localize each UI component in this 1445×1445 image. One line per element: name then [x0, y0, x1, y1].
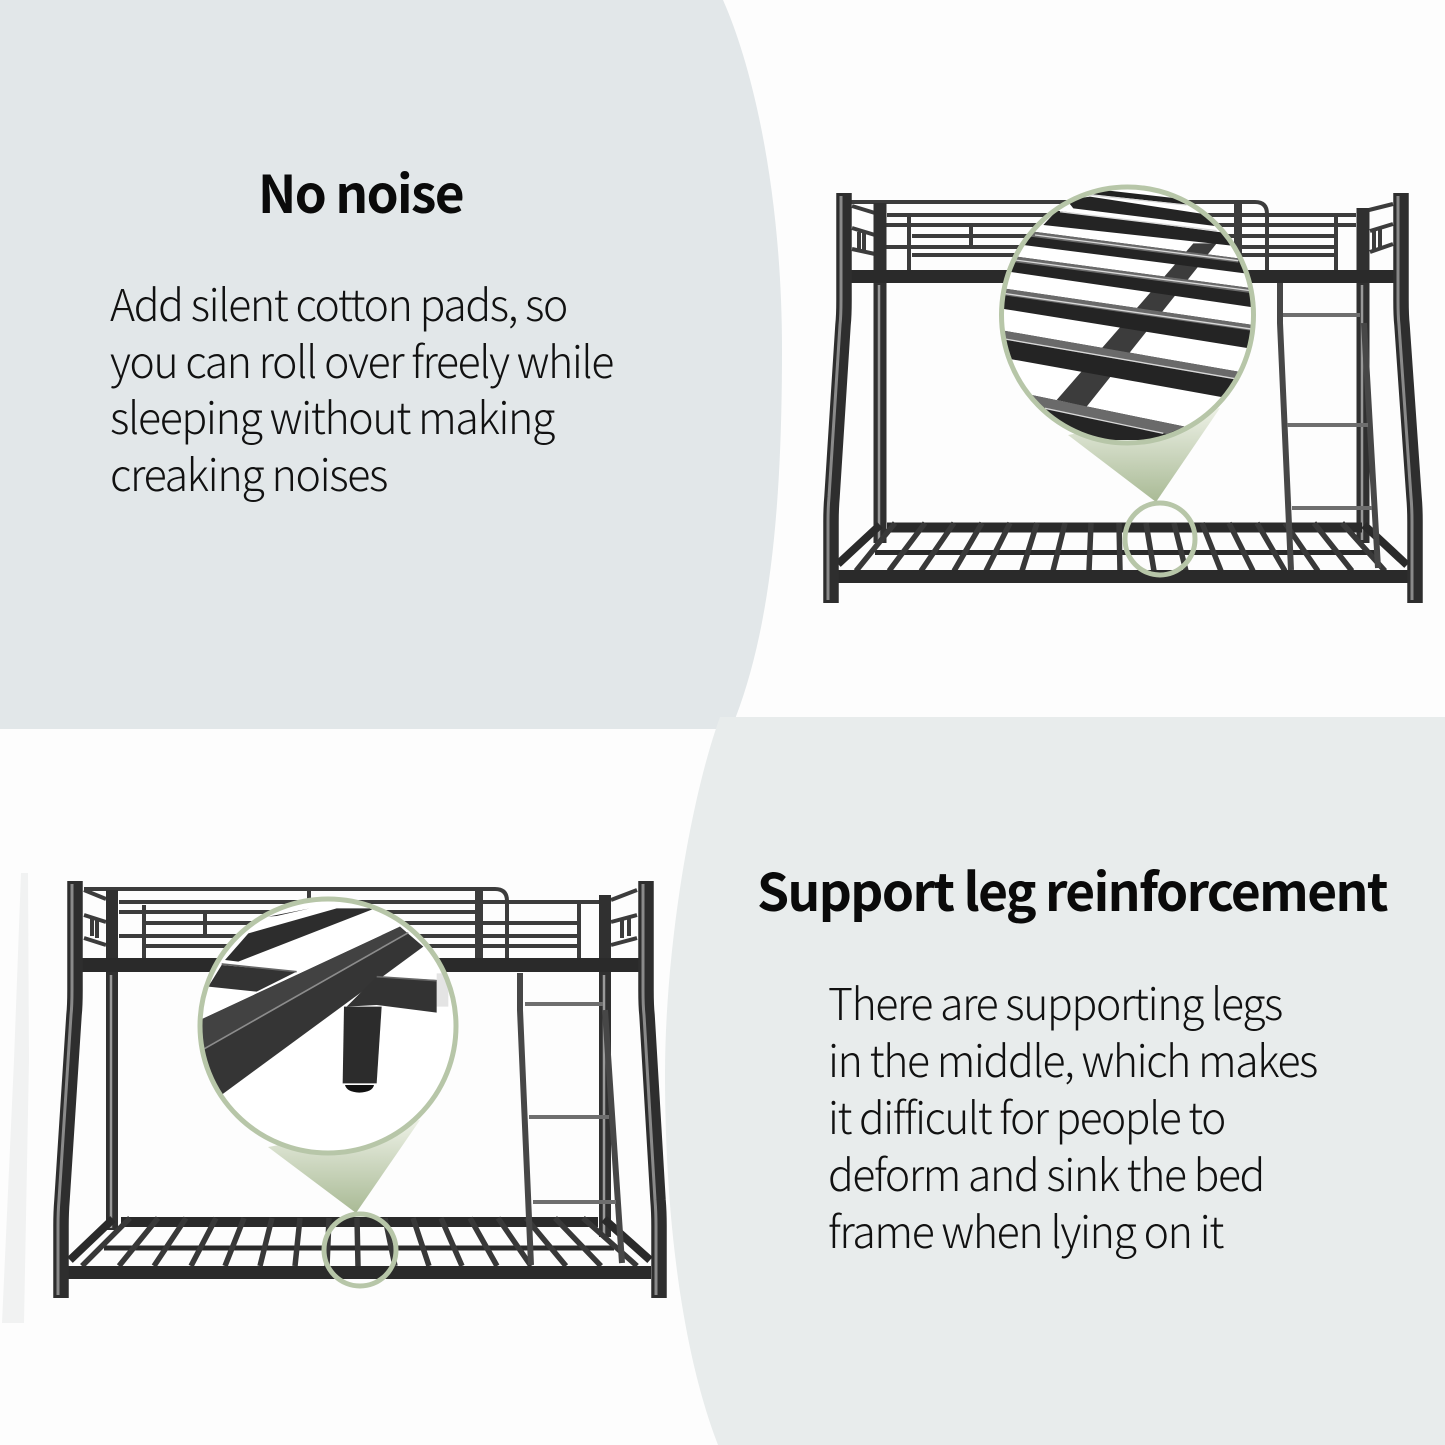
magnifier detail: slats: [1000, 187, 1254, 443]
ladder: [1280, 283, 1378, 570]
text block: support leg description: deform and sink the bed: [828, 1140, 1264, 1204]
top rail: [850, 270, 1395, 283]
top rail: [82, 958, 640, 972]
lower bunk deck: [838, 523, 1408, 576]
text block: no noise description: you can roll over freely while: [110, 327, 613, 391]
text block: no noise description: creaking noises: [110, 440, 387, 504]
heading: no noise: No noise: [258, 153, 463, 228]
text block: support leg description: frame when lying on it: [828, 1197, 1224, 1261]
magnifier detail: support leg: [200, 899, 456, 1153]
illustration: bunk bed with slat magnifier: [828, 187, 1415, 603]
upper guard rails: [84, 889, 637, 958]
panel: support leg reinforcement background: [665, 717, 1445, 1445]
ladder: [520, 973, 622, 1265]
text block: support leg description: in the middle, which makes: [828, 1026, 1317, 1090]
inner posts: [879, 203, 1363, 543]
corner posts: [828, 193, 1415, 603]
text block: no noise description: sleeping without making: [110, 383, 555, 447]
text block: no noise description: [110, 270, 613, 504]
text block: support leg description: There are supporting legs: [828, 969, 1282, 1033]
illustration: bunk bed with support leg magnifier: [58, 881, 659, 1298]
panel: no noise background: [0, 0, 782, 729]
heading: support leg reinforcement: Support leg reinforcement: [757, 851, 1388, 926]
small ring on deck: [324, 1214, 396, 1286]
decorative white post remnant at left edge: [2, 873, 29, 1323]
magnifier cone: [268, 1120, 420, 1213]
lower bunk deck: [68, 1218, 651, 1272]
small ring on deck: [1125, 503, 1195, 575]
magnifier cone: [1068, 408, 1220, 502]
text block: no noise description: Add silent cotton pads, so: [110, 270, 567, 334]
upper guard rails: [851, 202, 1393, 270]
text block: support leg description: it difficult for people to: [828, 1083, 1225, 1147]
corner posts: [58, 881, 659, 1298]
text block: support leg description: [828, 969, 1317, 1261]
inner posts: [111, 890, 605, 1237]
